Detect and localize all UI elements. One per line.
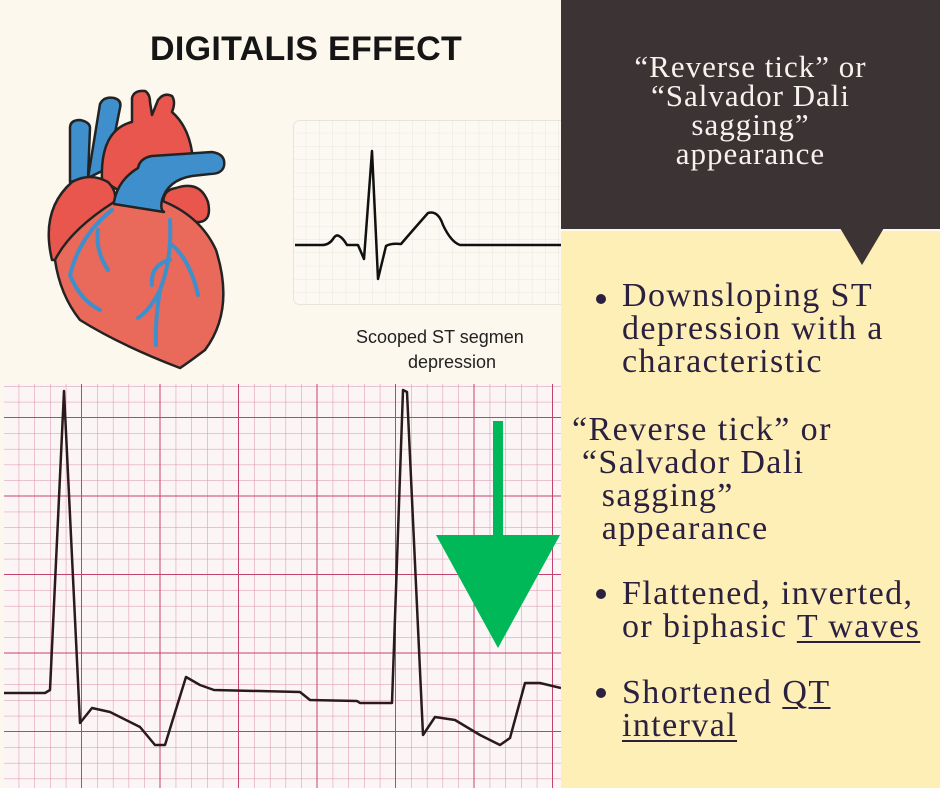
text: reverse tick: “Reverse tick” or (572, 411, 832, 448)
caption: scooped ST: Scooped ST segmen (356, 327, 524, 347)
icon: heart (47, 90, 226, 370)
text: reverse tick: sagging” (602, 477, 734, 514)
pointer triangle (840, 229, 884, 265)
text: depression (408, 352, 496, 372)
text: reverse tick: “Salvador Dali (582, 444, 804, 481)
bullet 1: Downsloping ST (622, 277, 873, 314)
text: reverse tick: appearance (602, 510, 769, 547)
bullet 3: interval (622, 707, 737, 744)
title: DIGITALIS EFFECT (150, 30, 462, 68)
bullet 2: Flattened, inverted, (622, 575, 913, 612)
text: reverse tick (572, 411, 832, 547)
panel: yellow list (561, 231, 940, 788)
callout text: “Salvador Dali (651, 78, 850, 113)
panel: dark callout (561, 0, 940, 229)
callout text: sagging” (691, 107, 810, 142)
bullet 3: Shortened QT (622, 674, 830, 711)
callout text: appearance (676, 136, 825, 171)
bullet 1 (596, 277, 884, 380)
callout text: “Reverse tick” or (634, 49, 867, 84)
bullet 1: characteristic (622, 343, 823, 380)
chart: ECG strip (4, 384, 561, 788)
callout text (634, 49, 867, 171)
bullet 3 (596, 674, 830, 744)
bullet 2 (596, 575, 920, 645)
bullet 2: or biphasic T waves (622, 608, 920, 645)
chart: small ECG diagram (293, 120, 561, 305)
arrow: green down (436, 421, 560, 648)
bullet 1: depression with a (622, 310, 884, 347)
